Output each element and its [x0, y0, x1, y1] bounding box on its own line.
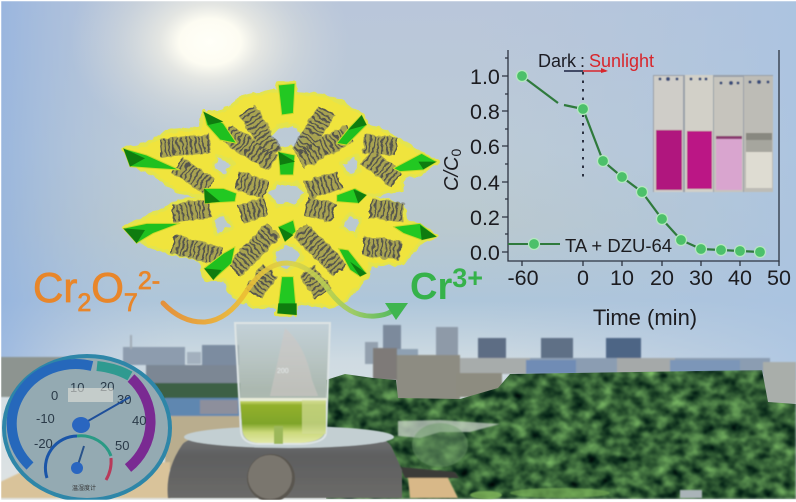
reactant label: dichromate: O [91, 264, 124, 311]
beaker with green solution [235, 323, 330, 444]
scale numbers: 10 [70, 380, 84, 395]
scale numbers [34, 379, 146, 453]
x axis tick labels: 20 [650, 266, 674, 290]
scale numbers: 40 [132, 413, 146, 428]
x axis tick labels: 50 [767, 266, 791, 290]
gray linker bands [160, 110, 403, 293]
scale numbers: -10 [36, 411, 55, 426]
needle and hub [72, 397, 130, 433]
y axis tick labels: 0.0 [470, 241, 500, 265]
scale arcs [12, 364, 151, 468]
y axis tick labels [470, 65, 500, 265]
gray linker haze [160, 110, 403, 293]
legend [508, 235, 672, 256]
magnetic stirrer hotplate [168, 426, 402, 502]
x axis tick labels: 40 [728, 266, 752, 290]
product label: Cr3+: 3+ [452, 263, 483, 293]
line chart: C/C0 vs time [441, 50, 791, 330]
reactant label: dichromate: 7 [124, 289, 138, 317]
scale numbers: 20 [100, 379, 114, 394]
dark node facets [123, 112, 437, 315]
product label: Cr3+: Cr [410, 266, 452, 308]
chart axes [502, 50, 779, 266]
arrow head [385, 303, 408, 320]
green metal nodes [123, 83, 437, 315]
dark and sunlight labels [538, 51, 654, 73]
data line [522, 76, 760, 252]
x axis tick labels [507, 266, 791, 290]
y axis tick labels: 0.4 [470, 171, 500, 195]
yellow ligand body with pores [123, 83, 437, 315]
x axis tick labels: 10 [610, 266, 634, 290]
city skyline [0, 325, 796, 470]
dotted divider [582, 72, 584, 180]
MOF framework structure [123, 83, 437, 315]
reactant label: dichromate: 2- [138, 267, 160, 295]
y axis tick labels: 0.2 [470, 206, 500, 230]
tree highlights and rooftops [398, 420, 702, 499]
x axis tick labels: 30 [689, 266, 713, 290]
humidity sub-dial [45, 436, 111, 480]
dark and sunlight labels: : [580, 51, 585, 71]
dial caption: 温湿度计 [72, 484, 96, 492]
scale numbers: -20 [34, 436, 53, 451]
scale numbers: 0 [51, 388, 58, 403]
data points [516, 70, 766, 258]
y axis tick labels: 0.8 [470, 100, 500, 124]
x axis tick labels: 0 [577, 266, 589, 290]
bright brand label [68, 388, 113, 402]
dark and sunlight labels: Sunlight [589, 51, 654, 71]
y axis tick labels: 0.6 [470, 135, 500, 159]
y axis tick labels: 1.0 [470, 65, 500, 89]
table surface [0, 462, 170, 498]
inset photo: cuvettes [653, 75, 773, 192]
scale numbers: 30 [117, 392, 131, 407]
reactant label: dichromate: 2 [77, 289, 91, 317]
trees [326, 370, 796, 499]
thermometer dial [2, 354, 172, 502]
reaction arrow [163, 263, 408, 322]
x axis tick labels: -60 [507, 266, 539, 290]
beaker with green solution: 200 [277, 368, 289, 375]
x axis title: Time (min) [593, 305, 697, 330]
y axis title: C/C [441, 157, 463, 191]
y axis title: 0 [448, 149, 464, 157]
scale numbers: 50 [115, 438, 129, 453]
legend: TA + DZU-64 [565, 235, 672, 256]
dark and sunlight labels: Dark [538, 51, 577, 71]
reactant label: dichromate: Cr [33, 264, 77, 311]
